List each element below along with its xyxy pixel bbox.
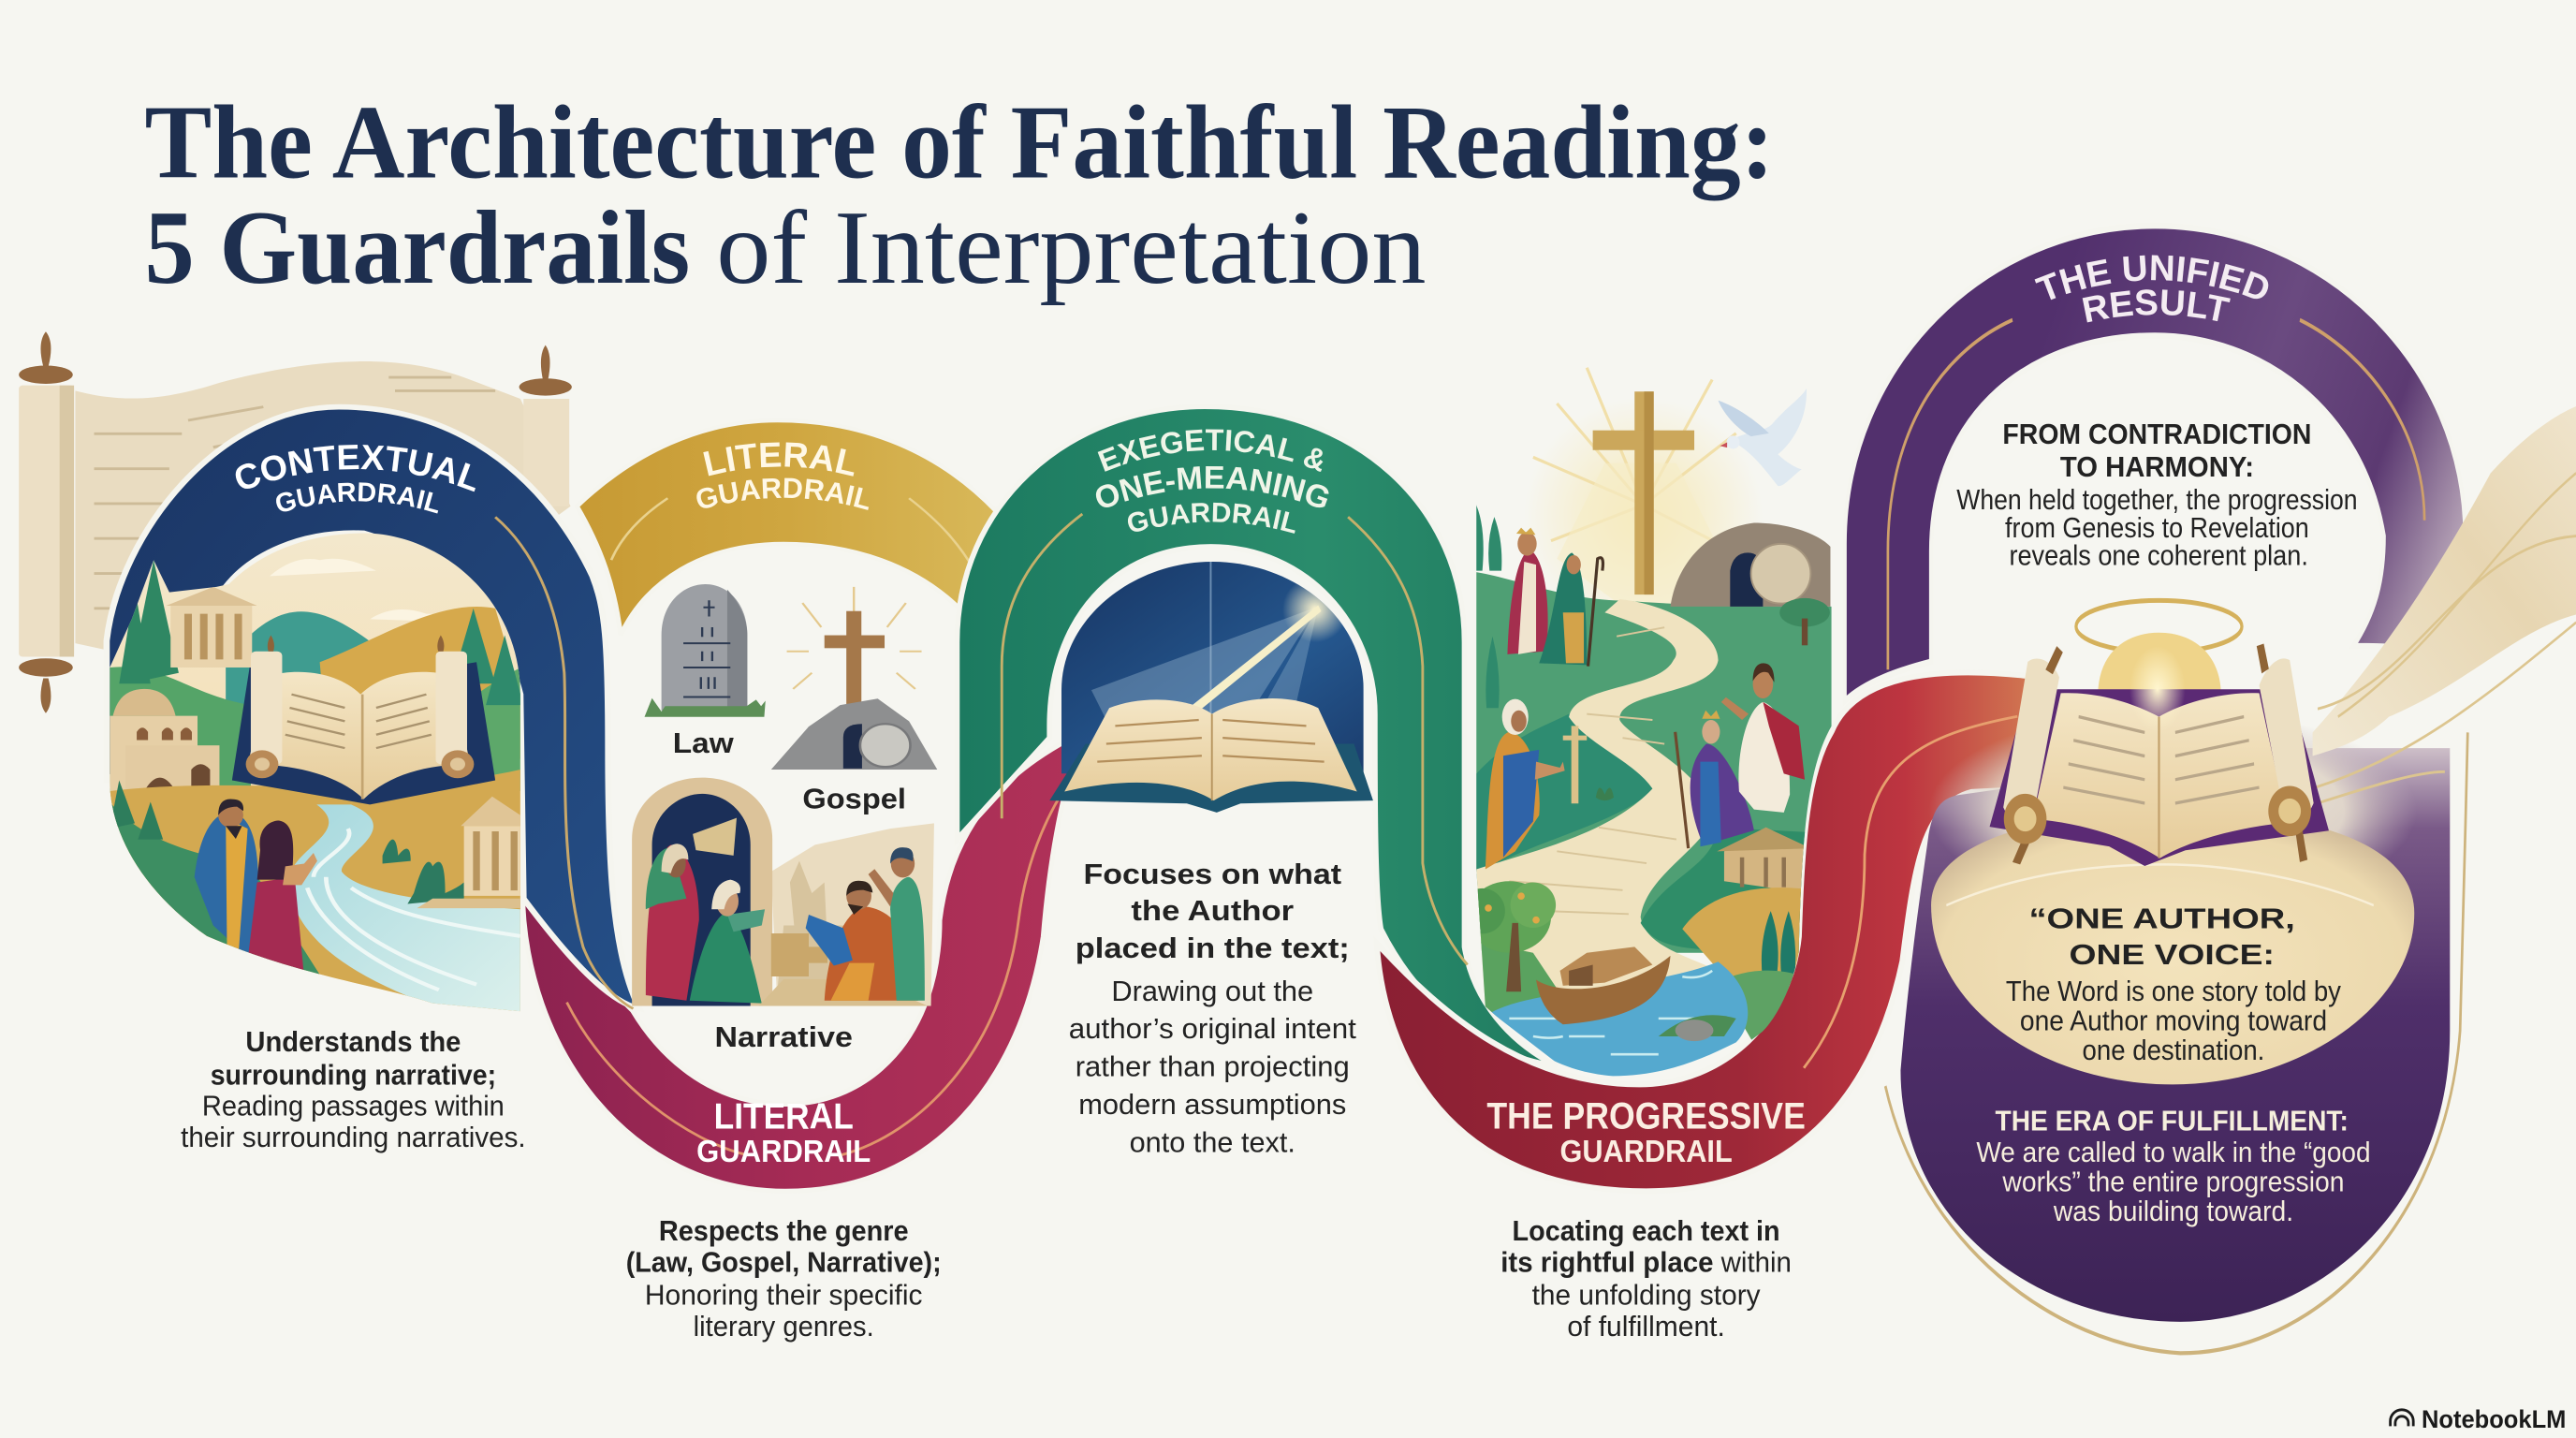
band: red ribbon inner gold line [1804,716,2017,1068]
text: one author one voice: one destination. [2083,1034,2264,1066]
icon: cross with rays [1524,368,1763,637]
icon: halo and book [1990,600,2329,866]
illustration: open book under inspired light [1049,552,1373,813]
text: literal description: Honoring their specific [645,1278,923,1311]
label: literal guardrail top: GUARDRAIL [696,477,869,510]
text: contextual description: their surrounding narratives. [181,1121,526,1153]
text: exegetical description: the Author [1131,894,1294,927]
icon: gospel cross and tomb [771,587,937,770]
text: from contradiction to harmony: TO HARMONY: [2060,450,2254,483]
band: literal guardrail gold arc [577,420,997,636]
title: of Interpretation [716,190,1426,306]
band: wave of parchment [2313,406,2576,756]
text: exegetical description [1069,858,1356,1158]
text: the era of fulfillment [1976,1104,2371,1227]
text: contextual description: Reading passages within [202,1090,505,1123]
panel: the unified result [1845,226,2576,1353]
text: progressive description: of fulfillment. [1567,1310,1725,1343]
label: exegetical guardrail: EXEGETICAL & [1097,429,1324,472]
label: Gospel: Gospel [802,782,906,814]
illustration: journey road to the cross [1459,368,1832,1076]
label: exegetical guardrail: GUARDRAIL [1127,502,1295,534]
text: progressive description: the unfolding story [1532,1278,1761,1311]
text: literal description [626,1214,942,1343]
text: the era of fulfillment: We are called to walk in the “good [1976,1136,2371,1168]
band: purple lower body [1900,748,2450,1322]
text: contextual description: Understands the [245,1025,461,1058]
text: from contradiction to harmony: FROM CONTRADICTION [2002,418,2311,450]
text: from contradiction to harmony [1956,418,2358,572]
icon: dove [1719,389,1807,486]
band: exegetical guardrail green arch [957,406,1557,1066]
icon: parchment scroll behind the first guardrail [19,331,572,713]
text: literal description: literary genres. [694,1310,874,1343]
text: exegetical description: author’s original intent [1069,1012,1356,1045]
label: literal guardrail lower: GUARDRAIL [696,1135,871,1169]
label: Narrative: Narrative [714,1020,853,1053]
text: exegetical description: rather than projecting [1076,1050,1350,1083]
band: progressive guardrail red ribbon [1377,672,2037,1191]
text: literal description: Respects the genre [659,1214,909,1247]
label: Law: Law [673,726,734,759]
logo: NotebookLM: NotebookLM [2422,1404,2566,1433]
text: the era of fulfillment: THE ERA OF FULFILLMENT: [1996,1104,2349,1137]
figures along the road [1507,550,1548,654]
icon: law tablet [645,584,766,717]
label: the progressive guardrail: GUARDRAIL [1559,1135,1733,1169]
title [145,85,1774,306]
label: the progressive guardrail: THE PROGRESSIVE [1486,1096,1806,1137]
label: contextual guardrail [236,445,476,513]
text: from contradiction to harmony: When held together, the progression [1956,483,2358,516]
label: exegetical guardrail: ONE-MEANING [1095,466,1329,507]
text: from contradiction to harmony: reveals one coherent plan. [2009,539,2308,572]
text: progressive description: its rightful place within [1500,1245,1792,1278]
text: one author one voice: The Word is one story told by [2006,975,2342,1007]
text: the era of fulfillment: works” the entire progression [2002,1165,2344,1197]
panel: literal guardrail genres [632,584,937,1006]
label: exegetical guardrail [1095,429,1329,534]
icon: wave lines [2315,473,2576,803]
label: the progressive guardrail [1486,1096,1806,1169]
label: literal guardrail lower [696,1097,871,1169]
band: purple upper arch [1845,226,2466,701]
text: exegetical description: Drawing out the [1111,975,1313,1007]
title: 5 Guardrails [145,190,690,306]
text: the era of fulfillment: was building toward. [2053,1195,2293,1227]
band: literal guardrail lower crimson ribbon [522,731,1084,1191]
text: one author one voice [2006,902,2342,1066]
title: The Architecture of Faithful Reading: [145,85,1774,201]
illustration: landscape with book and river [100,528,527,1017]
label: contextual guardrail: GUARDRAIL [276,482,438,513]
text: progressive description: Locating each text in [1513,1214,1780,1247]
illustration: narrative scene [632,778,934,1006]
text: one author one voice: ONE VOICE: [2070,938,2275,971]
text: progressive description [1500,1214,1792,1343]
text: from contradiction to harmony: from Genesis to Revelation [2005,511,2309,544]
label: literal guardrail top: LITERAL [703,442,854,477]
text: one author one voice: one Author moving toward [2020,1004,2327,1036]
text: contextual description: surrounding narrative; [211,1058,496,1091]
oval: cream panel [1931,811,2414,1084]
text: exegetical description: placed in the text; [1076,932,1350,964]
text: contextual description [181,1025,526,1153]
label: literal guardrail lower: LITERAL [714,1097,854,1137]
text: one author one voice: “ONE AUTHOR, [2029,902,2295,935]
label: contextual guardrail: CONTEXTUAL [236,445,476,492]
text: exegetical description: Focuses on what [1083,858,1341,890]
label: the unified result: THE UNIFIED [2035,255,2269,300]
label: literal guardrail top [696,442,869,510]
band: contextual guardrail navy arch [107,407,639,1008]
text: exegetical description: onto the text. [1130,1125,1295,1158]
text: exegetical description: modern assumptions [1078,1088,1346,1121]
label: the unified result: RESULT [2082,289,2231,322]
decorative outline: gold ring [1885,732,2467,1353]
text: literal description: (Law, Gospel, Narrative); [626,1245,942,1278]
